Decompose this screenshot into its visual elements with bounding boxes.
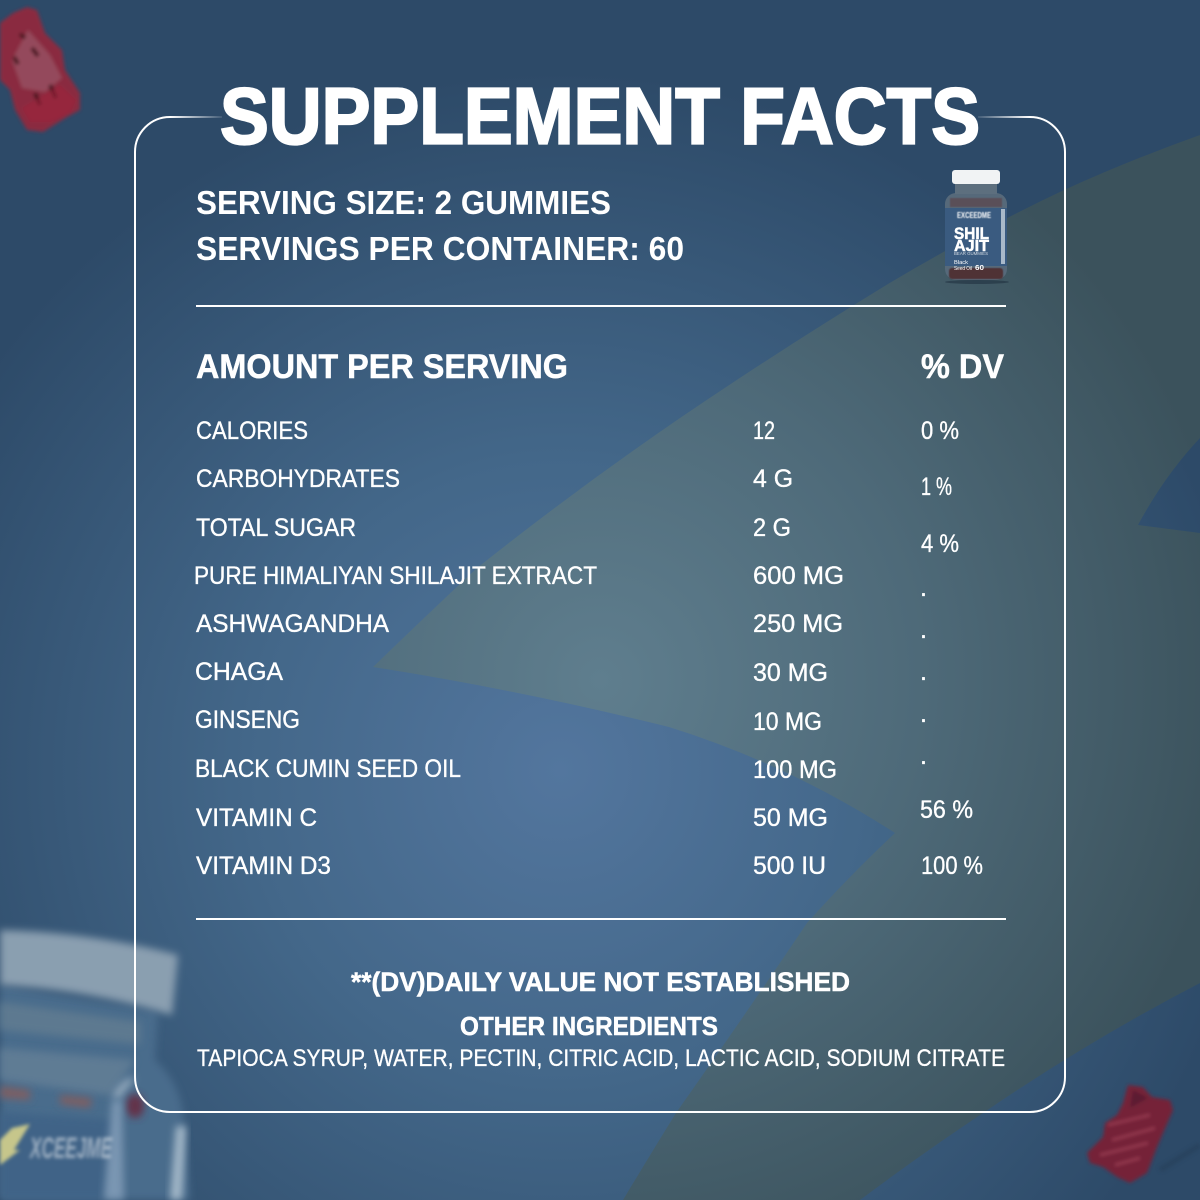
nutrient names: CHAGA bbox=[195, 658, 283, 686]
daily values: . bbox=[920, 658, 927, 686]
icon: product jar bbox=[945, 170, 1009, 284]
daily values: 1 % bbox=[921, 473, 952, 501]
icon: product jar: BEAR GUMMIES bbox=[954, 251, 988, 256]
amounts: 30 MG bbox=[753, 659, 828, 687]
daily values: . bbox=[920, 742, 927, 770]
serving information bbox=[196, 184, 684, 267]
gummy shadow bbox=[1160, 1145, 1200, 1170]
nutrient names: CALORIES bbox=[196, 417, 308, 445]
amounts: 10 MG bbox=[753, 708, 822, 736]
other ingredients heading: OTHER INGREDIENTS bbox=[460, 1011, 718, 1041]
daily values: 4 % bbox=[921, 530, 959, 558]
nutrient names: VITAMIN C bbox=[196, 804, 317, 832]
serving information: SERVINGS PER CONTAINER: 60 bbox=[196, 230, 684, 267]
daily values: . bbox=[920, 700, 927, 728]
serving information: SERVING SIZE: 2 GUMMIES bbox=[196, 184, 611, 221]
icon: product jar: EXCEEDME bbox=[957, 211, 991, 220]
daily values: 56 % bbox=[920, 796, 973, 824]
icon: product jar: AJIT bbox=[954, 238, 989, 255]
nutrient names: TOTAL SUGAR bbox=[196, 514, 356, 542]
daily values bbox=[920, 417, 983, 880]
daily values: . bbox=[920, 616, 927, 644]
other ingredients list: TAPIOCA SYRUP, WATER, PECTIN, CITRIC ACID, LACTIC ACID, SODIUM CITRATE bbox=[197, 1045, 1005, 1072]
daily values: 100 % bbox=[921, 852, 983, 880]
icon: product jar: SHIL bbox=[954, 224, 989, 243]
amounts: 50 MG bbox=[753, 804, 828, 832]
amounts: 250 MG bbox=[753, 610, 843, 638]
table heading: amount per serving: AMOUNT PER SERVING bbox=[196, 348, 568, 386]
amounts: 4 G bbox=[753, 465, 793, 493]
amounts: 600 MG bbox=[753, 562, 844, 590]
daily values: 0 % bbox=[921, 417, 959, 445]
nutrient names: PURE HIMALIYAN SHILAJIT EXTRACT bbox=[194, 562, 597, 590]
icon: product jar: Seed Oil bbox=[954, 266, 972, 272]
footnote: **(DV)DAILY VALUE NOT ESTABLISHED bbox=[351, 967, 850, 997]
icon: product jar: Black bbox=[954, 260, 969, 266]
table heading: percent daily value: % DV bbox=[921, 348, 1004, 386]
nutrient names: BLACK CUMIN SEED OIL bbox=[195, 755, 461, 783]
amounts: 500 IU bbox=[753, 852, 826, 880]
title: SUPPLEMENT FACTS bbox=[220, 72, 980, 160]
gummy bear, top left bbox=[0, 7, 80, 132]
gummy bear, bottom right bbox=[1087, 1085, 1173, 1183]
amounts bbox=[753, 417, 844, 880]
daily values: . bbox=[920, 574, 927, 602]
icon: product jar: 60 bbox=[975, 265, 984, 272]
nutrient names: VITAMIN D3 bbox=[196, 852, 331, 880]
blurred jar, bottom left bbox=[0, 930, 190, 1200]
nutrient names: ASHWAGANDHA bbox=[196, 610, 389, 638]
nutrient names bbox=[194, 417, 597, 880]
amounts: 12 bbox=[753, 417, 775, 445]
blurred jar, bottom left: XCEEJME bbox=[29, 1132, 113, 1165]
nutrient names: CARBOHYDRATES bbox=[196, 465, 400, 493]
amounts: 2 G bbox=[753, 514, 791, 542]
amounts: 100 MG bbox=[753, 756, 837, 784]
nutrient names: GINSENG bbox=[195, 706, 300, 734]
panel outline bbox=[135, 117, 1065, 1112]
